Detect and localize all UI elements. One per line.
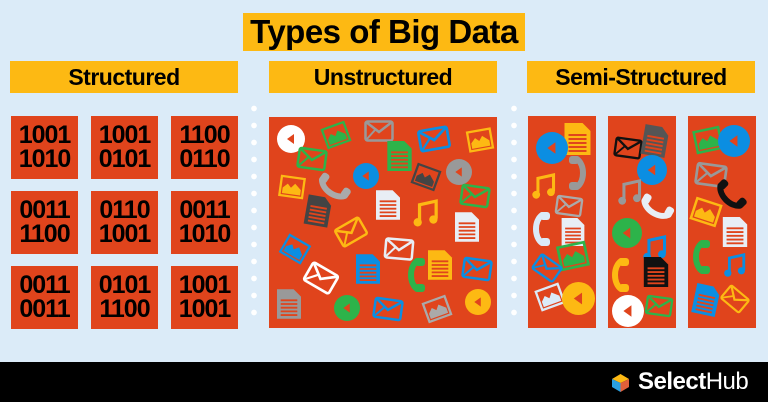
divider dots right [511, 100, 517, 320]
semi-structured panel 2 [608, 116, 676, 328]
panel: structured tiles: 1100 [19, 220, 70, 248]
logo: SelectHub: SelectHub [638, 368, 748, 395]
panel: structured tiles: 0110 [99, 196, 150, 224]
panel: structured tiles: 1001 [99, 220, 150, 248]
heading: structured: Structured [68, 64, 180, 90]
heading: semi-structured: Semi-Structured [555, 64, 727, 90]
semi-structured panel 3 [688, 116, 756, 328]
title: Types of Big Data [250, 13, 518, 50]
panel: structured tiles: 0011 [19, 295, 70, 323]
heading: structured [10, 61, 238, 93]
panel: structured tiles: 0011 [19, 196, 70, 224]
panel: structured tiles: 0101 [99, 145, 150, 173]
heading: semi-structured [527, 61, 755, 93]
panel: structured tiles: 0011 [19, 271, 70, 299]
panel: structured tiles: 1001 [179, 271, 230, 299]
panel: structured tiles: 1010 [19, 145, 70, 173]
panel: structured tiles: 0101 [99, 271, 150, 299]
heading: unstructured [269, 61, 497, 93]
panel: structured tiles: 1001 [99, 121, 150, 149]
divider dots left [251, 100, 257, 320]
panel: structured tiles: 1100 [179, 121, 230, 149]
icon: hex cube [612, 374, 629, 392]
panel: structured tiles: 0011 [179, 196, 230, 224]
footer bar [0, 362, 768, 402]
panel: structured tiles: 1001 [179, 295, 230, 323]
panel: structured tiles [11, 116, 238, 329]
panel: structured tiles: 1100 [99, 295, 150, 323]
semi-structured panel 1 [528, 116, 596, 328]
panel: structured tiles: 1010 [179, 220, 230, 248]
heading: unstructured: Unstructured [314, 64, 452, 90]
panel: structured tiles: 1001 [19, 121, 70, 149]
unstructured panel [269, 117, 497, 328]
panel: structured tiles: 0110 [179, 145, 230, 173]
